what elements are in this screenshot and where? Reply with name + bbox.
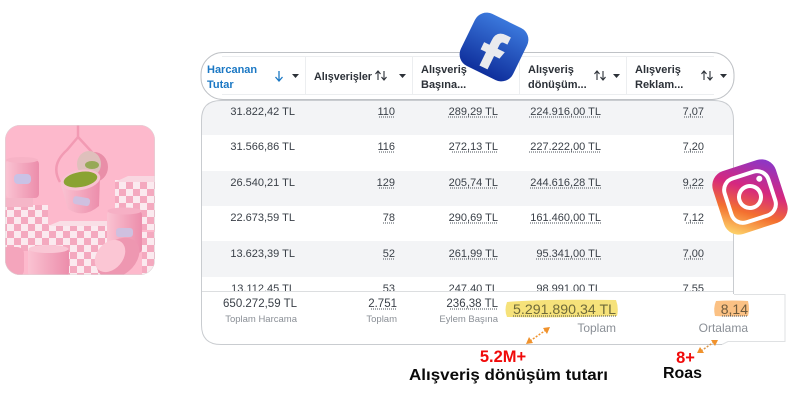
product photo: pink jars and checkered boxes — [5, 125, 155, 275]
row 2: 272,13 TL — [449, 141, 498, 153]
front jar of matcha — [61, 170, 100, 214]
row 6: 247,40 TL — [449, 283, 498, 295]
row 1: 7,07 — [683, 106, 704, 118]
pink jar left — [6, 157, 39, 198]
column: Harcanan Tutar — [207, 64, 299, 91]
row 2: 227.222,00 TL — [530, 141, 601, 153]
column: Alışveriş dönüşüm — [528, 64, 620, 91]
highlighted average roas: 8,14 — [721, 301, 748, 317]
pink jar corner — [5, 247, 24, 275]
column: Alışveriş Başına — [421, 64, 467, 91]
callout: conversion value: Alışveriş dönüşüm tutarı — [409, 367, 608, 384]
row 3: 9,22 — [683, 177, 704, 189]
table header pill — [201, 52, 734, 100]
pink jar lying down — [94, 238, 140, 274]
row 1: 31.822,42 TL — [230, 106, 295, 118]
row 1: 110 — [377, 106, 395, 118]
pink jar bottom — [28, 245, 69, 276]
column: Alışverişler: Alışverişler — [314, 71, 373, 83]
pink jar right — [107, 208, 142, 253]
row 5: 95.341,00 TL — [536, 248, 601, 260]
column: Alışveriş dönüşüm: Alışveriş — [528, 64, 574, 76]
row 2 — [230, 141, 704, 153]
column: Alışveriş Reklam: Reklam... — [635, 79, 683, 91]
checkered box left — [6, 205, 48, 251]
back jar of matcha — [77, 151, 108, 182]
table body panel — [202, 101, 733, 277]
row 3: 26.540,21 TL — [230, 177, 295, 189]
row 2: 31.566,86 TL — [230, 141, 295, 153]
footer summary panel — [201, 100, 785, 345]
row 1: 289,29 TL — [449, 106, 498, 118]
checkered box right — [115, 176, 155, 230]
column: Alışveriş Reklam: Alışveriş — [635, 64, 681, 76]
arrow to average roas — [697, 340, 718, 353]
checkered box center — [48, 221, 110, 275]
callout: roas: 8+ — [676, 349, 695, 367]
column: Alışveriş Başına: Alışveriş — [421, 64, 467, 76]
row 4: 7,12 — [683, 212, 704, 224]
icon: instagram — [708, 155, 792, 239]
total spend: 650.272,59 TL — [223, 298, 298, 310]
column: Alışveriş Reklam — [635, 64, 727, 91]
column: Alışveriş dönüşüm: dönüşüm... — [528, 79, 587, 91]
row 6: 53 — [383, 283, 395, 295]
row 3 — [230, 177, 704, 189]
row 5: 13.623,39 TL — [230, 248, 295, 260]
highlighted average roas — [699, 300, 749, 335]
row 4: 22.673,59 TL — [230, 212, 295, 224]
callout: roas — [663, 349, 702, 382]
row 2: 7,20 — [683, 141, 704, 153]
row 5: 261,99 TL — [449, 248, 498, 260]
row 5: 52 — [383, 248, 395, 260]
cost per action — [439, 298, 499, 325]
checkered box lower right — [142, 232, 155, 275]
row 3: 129 — [377, 177, 395, 189]
total purchases: 2.751 — [368, 298, 397, 310]
highlighted average roas: Ortalama — [699, 321, 748, 335]
row 6: 7,55 — [683, 283, 704, 295]
row 4: 290,69 TL — [449, 212, 498, 224]
row 4 — [230, 212, 704, 224]
row 6 — [231, 283, 704, 295]
row 5 — [230, 248, 704, 260]
cost per action: Eylem Başına — [439, 314, 499, 325]
callout: conversion value — [409, 348, 608, 384]
row stripes — [201, 100, 734, 277]
column: Alışverişler — [314, 71, 406, 83]
callout: roas: Roas — [663, 365, 702, 382]
row 6: 13.112,45 TL — [231, 283, 295, 295]
icon: facebook — [455, 8, 533, 86]
gripper arm — [55, 126, 93, 182]
column: Harcanan Tutar: Harcanan — [207, 64, 257, 76]
column: Harcanan Tutar: Tutar — [207, 79, 234, 91]
highlighted conversion total — [506, 300, 618, 335]
row 2: 116 — [377, 141, 395, 153]
row 6: 98.991,00 TL — [536, 283, 601, 295]
cost per action: 236,38 TL — [446, 298, 499, 310]
row 3: 244.616,28 TL — [530, 177, 601, 189]
row 1: 224.916,00 TL — [530, 106, 601, 118]
total purchases: Toplam — [366, 314, 397, 325]
row 4: 78 — [383, 212, 395, 224]
row 5: 7,00 — [683, 248, 704, 260]
table rows — [230, 106, 704, 295]
row 4: 161.460,00 TL — [530, 212, 601, 224]
callout: conversion value: 5.2M+ — [480, 348, 526, 366]
total spend: Toplam Harcama — [225, 314, 298, 325]
row 1 — [230, 106, 704, 118]
highlighted conversion total: 5.291.890,34 TL — [513, 301, 616, 317]
total spend — [223, 298, 298, 325]
row 3: 205,74 TL — [449, 177, 498, 189]
arrow to conversion total — [526, 327, 550, 344]
total purchases — [366, 298, 397, 325]
highlighted conversion total: Toplam — [577, 321, 616, 335]
column: Alışveriş Başına: Başına... — [421, 79, 466, 91]
